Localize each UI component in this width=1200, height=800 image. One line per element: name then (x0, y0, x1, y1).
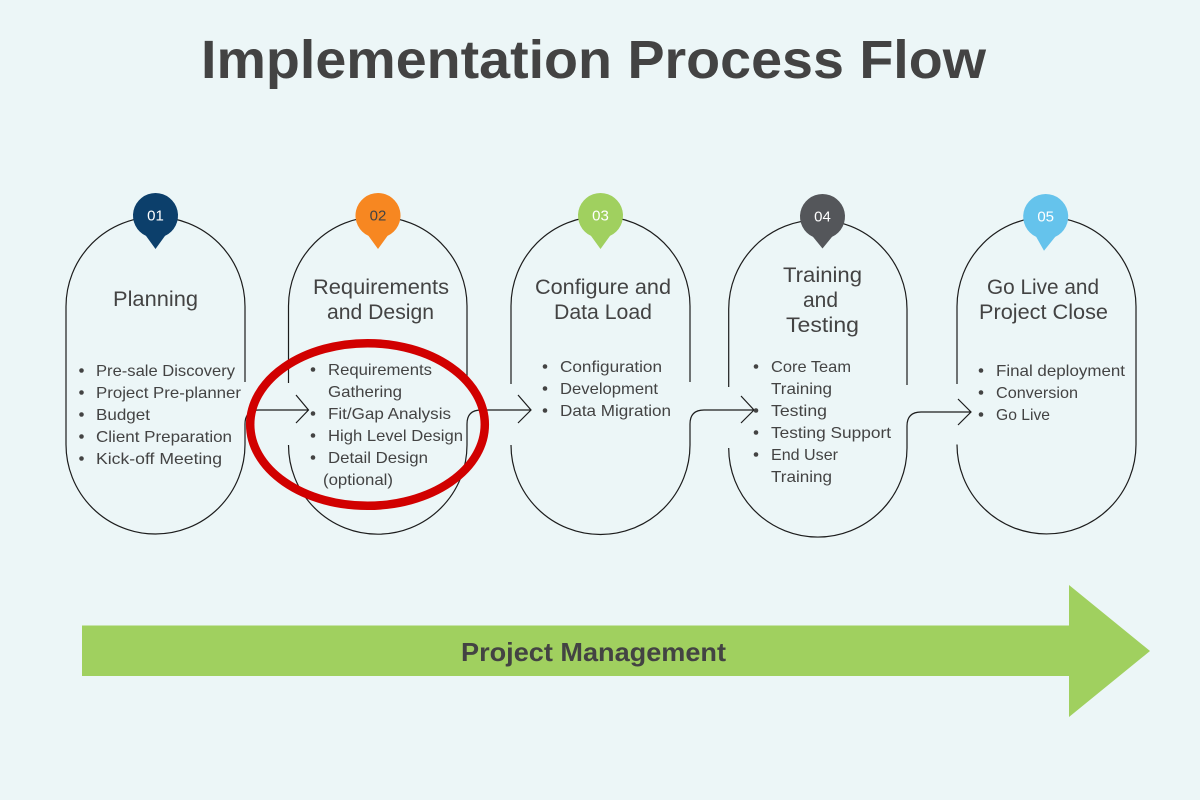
icon: pin 02 (355, 193, 401, 249)
pill outline (957, 217, 1136, 534)
heading: go live and project close: Go Live and (987, 276, 1099, 299)
pill outline and connector arrow to step 05 (729, 220, 971, 537)
list: planning tasks: Client Preparation (96, 429, 232, 446)
heading: requirements and design: and Design (327, 301, 434, 324)
list: training tasks: Testing (771, 403, 827, 420)
list: planning tasks (79, 363, 242, 468)
list: go live tasks: Go Live (996, 407, 1050, 424)
title: Implementation Process Flow (201, 30, 987, 90)
list: configure tasks (543, 359, 671, 420)
icon: pin 01: 01 (147, 208, 164, 224)
list: requirements tasks: High Level Design (328, 428, 463, 445)
list: training tasks (754, 359, 892, 486)
heading: requirements and design (313, 276, 449, 324)
list: training tasks: Core Team (771, 359, 851, 376)
list: training tasks: Testing Support (771, 425, 892, 442)
list: configure tasks: Configuration (560, 359, 662, 376)
icon: pin 04: 04 (814, 208, 831, 226)
list: planning tasks: Kick-off Meeting (96, 451, 222, 468)
list: go live tasks: Conversion (996, 385, 1078, 402)
callout: red highlight ellipse around step 02 list (250, 343, 485, 506)
panel: step 02 requirements and design (288, 193, 531, 534)
heading: configure and data load: Data Load (554, 301, 652, 324)
list: training tasks: Training (771, 381, 832, 398)
list: training tasks: End User (771, 447, 839, 464)
list: go live tasks (979, 363, 1126, 424)
heading: configure and data load (535, 276, 671, 324)
arrow: project management (82, 585, 1150, 717)
heading: training and testing: Testing (786, 314, 859, 337)
pill outline and connector arrow to step 02 (66, 217, 308, 534)
heading: requirements and design: Requirements (313, 276, 449, 299)
panel: step 01 planning (66, 193, 308, 534)
icon: pin 02: 02 (370, 208, 386, 224)
list: planning tasks: Budget (96, 407, 151, 424)
list: planning tasks: Pre-sale Discovery (96, 363, 235, 380)
heading: training and testing: Training (783, 264, 862, 287)
heading: training and testing: and (803, 289, 838, 312)
list: requirements tasks: Fit/Gap Analysis (328, 406, 451, 423)
panel: step 05 go live and project close (957, 194, 1136, 534)
list: requirements tasks: (optional) (323, 472, 393, 489)
pill outline and connector arrow to step 03 (288, 217, 531, 534)
panel: step 03 configure and data load (511, 193, 754, 534)
list: training tasks: Training (771, 469, 832, 486)
list: planning tasks: Project Pre-planner (96, 385, 242, 402)
icon: pin 05: 05 (1037, 208, 1054, 226)
heading: configure and data load: Configure and (535, 276, 671, 299)
icon: pin 03 (578, 193, 623, 249)
list: requirements tasks: Requirements (328, 362, 432, 379)
heading: go live and project close: Project Close (979, 301, 1108, 324)
icon: pin 04 (800, 194, 845, 248)
heading: planning: Planning (113, 288, 198, 311)
list: requirements tasks: Detail Design (328, 450, 428, 467)
icon: pin 01 (133, 193, 178, 249)
heading: training and testing (783, 264, 862, 337)
list: configure tasks: Data Migration (560, 403, 671, 420)
list: go live tasks: Final deployment (996, 363, 1126, 380)
list: configure tasks: Development (560, 381, 659, 398)
heading: go live and project close (979, 276, 1108, 324)
list: requirements tasks (311, 362, 463, 489)
icon: pin 03: 03 (592, 208, 609, 224)
panel: step 04 training and testing (729, 194, 971, 537)
list: requirements tasks: Gathering (328, 384, 402, 401)
icon: pin 05 (1023, 194, 1068, 251)
label: project management: Project Management (461, 637, 726, 667)
pill outline and connector arrow to step 04 (511, 216, 754, 534)
